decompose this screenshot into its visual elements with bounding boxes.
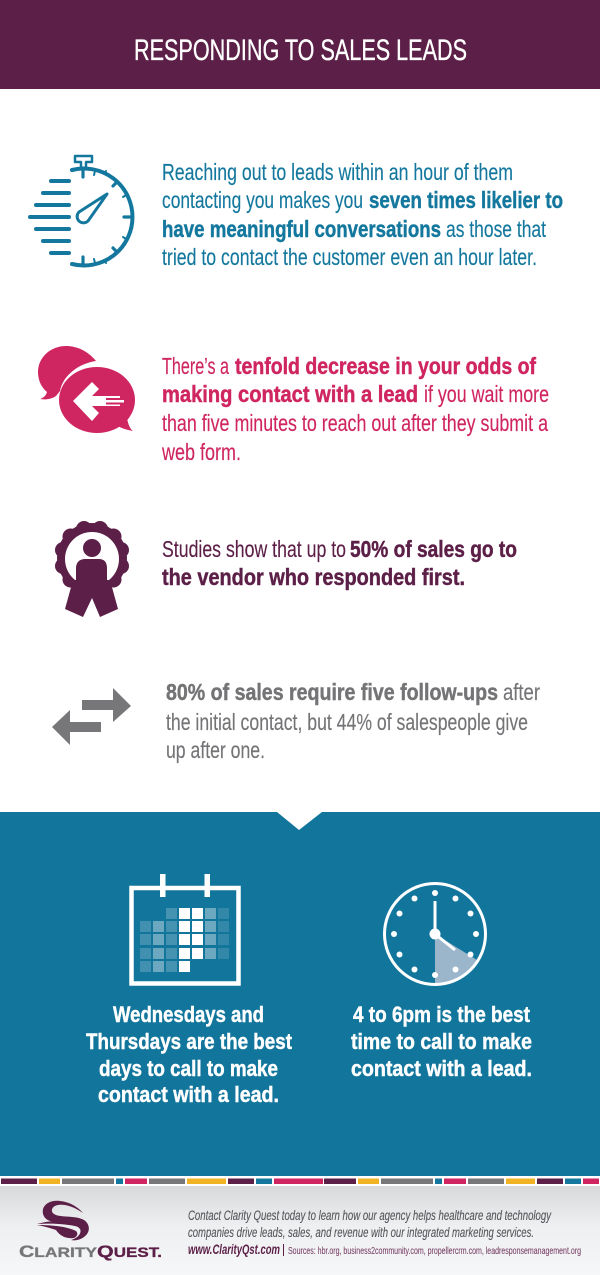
text: best days: Wednesdays and xyxy=(113,1002,264,1027)
colored footer strip xyxy=(1,1178,599,1184)
text: best time: time to call to make xyxy=(351,1029,532,1054)
panel: best times to call xyxy=(0,812,600,1176)
icon: stopwatch xyxy=(30,156,132,266)
panel: footer xyxy=(0,1186,600,1275)
text: 80% of sales: 80% of sales require five follow-ups xyxy=(166,679,498,705)
title banner xyxy=(0,0,600,89)
text: best days xyxy=(86,1002,293,1107)
logo: Clarity Quest: C LARITY xyxy=(19,1243,97,1261)
text: best time: 4 to 6pm is the best xyxy=(353,1002,531,1027)
text: contact call to action: www.ClarityQst.com xyxy=(188,1242,280,1257)
text: seven times likelier: have meaningful conversations xyxy=(162,216,441,242)
icon: clock xyxy=(384,884,486,984)
text: seven times likelier xyxy=(162,159,563,270)
text: 80% of sales xyxy=(166,679,540,763)
text: 50% of sales: 50% of sales go to xyxy=(350,536,517,562)
text: best time xyxy=(351,1002,532,1081)
text: tenfold decrease: There’s a xyxy=(162,353,229,379)
text: tenfold decrease: web form. xyxy=(161,439,241,465)
text: seven times likelier: contacting you makes you xyxy=(162,187,363,213)
text: tenfold decrease: tenfold decrease in your odds of xyxy=(235,353,536,379)
title banner: RESPONDING TO SALES LEADS xyxy=(134,34,467,67)
text: best days: days to call to make xyxy=(99,1056,278,1081)
text: tenfold decrease xyxy=(161,353,549,465)
text: 50% of sales xyxy=(162,536,517,590)
icon: award ribbon with person xyxy=(55,521,129,617)
logo: Clarity Quest xyxy=(19,1201,162,1261)
icon: exchange arrows xyxy=(52,688,131,745)
icon: chat bubbles with arrow xyxy=(38,346,135,433)
text: seven times likelier: as those that xyxy=(446,216,546,242)
text: contact call to action xyxy=(188,1208,552,1257)
text: 50% of sales: Studies show that up to xyxy=(162,536,346,562)
text: best days: contact with a lead. xyxy=(98,1082,279,1107)
icon: calendar xyxy=(132,874,238,984)
logo: Clarity Quest: Q UEST. xyxy=(97,1242,162,1261)
text: best time: contact with a lead. xyxy=(351,1056,532,1081)
text: 50% of sales: the vendor who responded first. xyxy=(162,564,465,590)
text: 80% of sales: after xyxy=(503,679,540,705)
text: best days: Thursdays are the best xyxy=(86,1029,293,1054)
text: 80% of sales: up after one. xyxy=(166,737,265,763)
text: tenfold decrease: making contact with a lead xyxy=(162,381,418,407)
text: tenfold decrease: if you wait more xyxy=(424,381,549,407)
